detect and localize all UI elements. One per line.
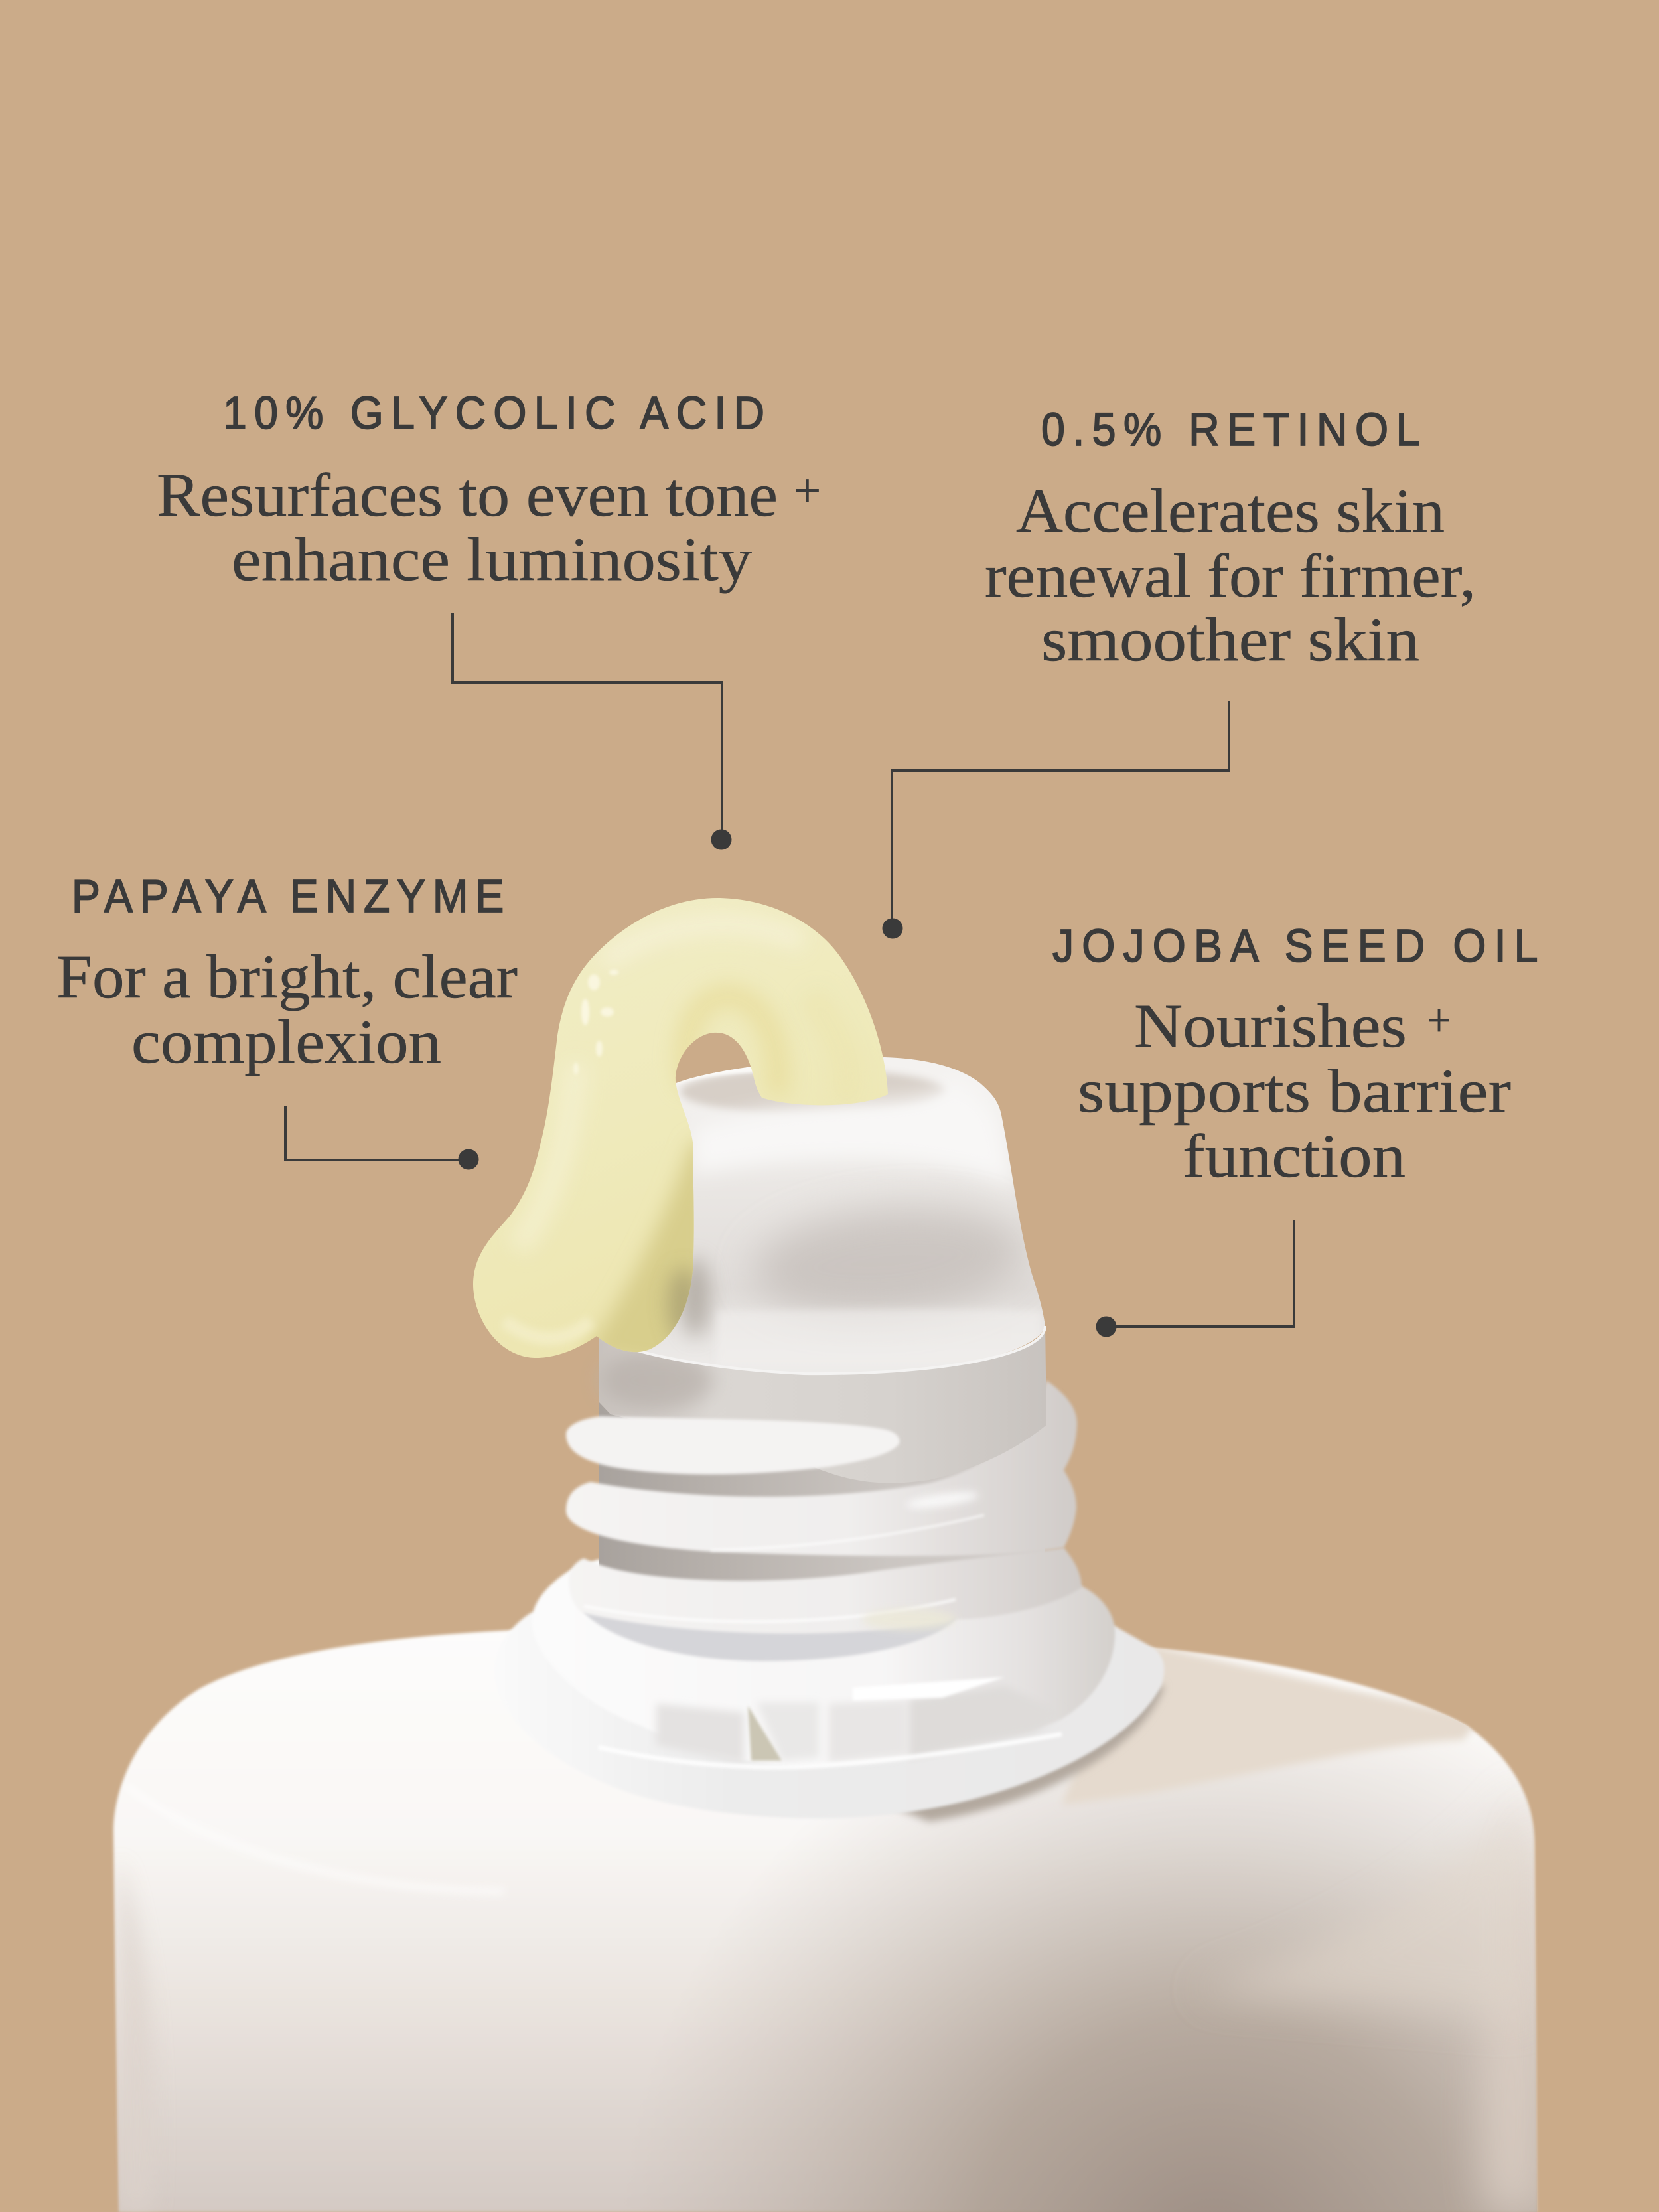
description: jojoba seed oil: Nourishes bbox=[1134, 992, 1407, 1061]
description: retinol: smoother skin bbox=[1041, 606, 1419, 674]
description: papaya enzyme bbox=[56, 943, 518, 1076]
cap front rim bbox=[694, 1084, 1013, 1183]
neck bbox=[599, 1387, 1045, 1593]
rib panels bbox=[656, 1686, 1062, 1763]
description: glycolic acid: enhance luminosity bbox=[232, 526, 753, 594]
band under cap bbox=[599, 1324, 1046, 1483]
description: jojoba seed oil: + bbox=[1427, 994, 1451, 1047]
callout: papaya enzyme bbox=[56, 871, 518, 1169]
description: jojoba seed oil: function bbox=[1183, 1122, 1406, 1191]
tube body bbox=[113, 1629, 1540, 2212]
leader line: glycolic acid bbox=[453, 613, 731, 849]
thread 2 highlight bbox=[905, 1489, 979, 1511]
ring cast shadow bbox=[889, 1686, 1165, 1822]
heading: papaya enzyme: PAPAYA ENZYME bbox=[72, 871, 504, 922]
description: retinol bbox=[985, 477, 1476, 674]
leader line: jojoba seed oil bbox=[1096, 1220, 1294, 1337]
leader line: retinol bbox=[883, 701, 1229, 938]
lower ring bbox=[494, 1613, 1164, 1818]
callout: 0.5% retinol bbox=[883, 404, 1476, 938]
description: retinol: renewal for firmer, bbox=[985, 542, 1476, 611]
rib notch bbox=[748, 1706, 782, 1761]
cap back rim bbox=[677, 1067, 753, 1083]
collar ring bbox=[494, 1560, 1165, 1822]
callout: 10% glycolic acid bbox=[157, 388, 821, 849]
leader line: papaya enzyme bbox=[285, 1106, 479, 1169]
cap opening bbox=[680, 1069, 946, 1114]
description: glycolic acid: Resurfaces to even tone bbox=[157, 461, 778, 530]
description: papaya enzyme: complexion bbox=[131, 1008, 441, 1076]
callout: jojoba seed oil bbox=[1052, 921, 1538, 1337]
description: jojoba seed oil bbox=[1078, 992, 1511, 1191]
thread 1 bbox=[566, 1416, 899, 1475]
cream highlights bbox=[573, 970, 618, 1074]
description: glycolic acid bbox=[157, 461, 821, 594]
product: tube with cream bbox=[113, 898, 1540, 2212]
upper step bbox=[532, 1560, 1115, 1765]
thread 3 bbox=[569, 1548, 1082, 1633]
screw threads bbox=[566, 1324, 1082, 1633]
ring ridge highlight bbox=[599, 1734, 1062, 1767]
cap bbox=[599, 1057, 1045, 1374]
thread 2 bbox=[566, 1380, 1077, 1556]
description: papaya enzyme: For a bright, clear bbox=[56, 943, 518, 1011]
step edge highlight bbox=[853, 1677, 1005, 1700]
description: jojoba seed oil: supports barrier bbox=[1078, 1057, 1511, 1126]
heading: 0.5% retinol: 0.5% RETINOL bbox=[1041, 404, 1419, 456]
description: glycolic acid: + bbox=[794, 464, 821, 517]
heading: jojoba seed oil: JOJOBA SEED OIL bbox=[1052, 921, 1538, 972]
lower neck shade bbox=[584, 1593, 956, 1661]
heading: 10% glycolic acid: 10% GLYCOLIC ACID bbox=[223, 388, 764, 439]
description: retinol: Accelerates skin bbox=[1016, 477, 1445, 546]
cream bbox=[473, 898, 888, 1367]
